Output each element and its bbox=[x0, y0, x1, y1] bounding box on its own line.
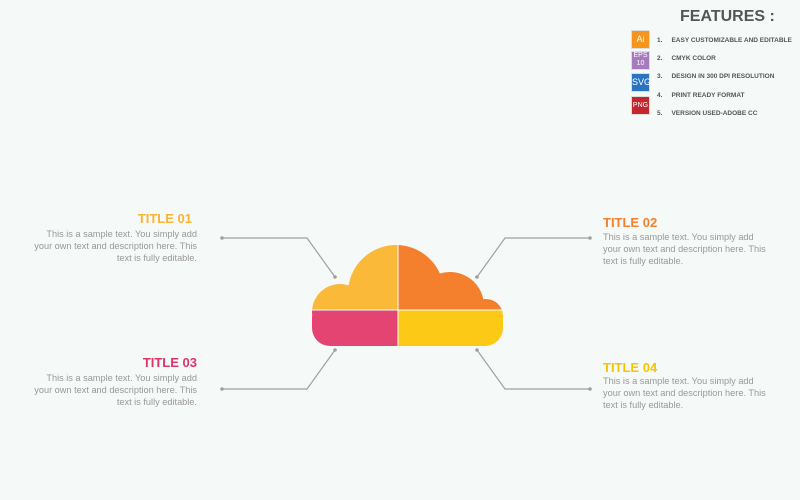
cloud diagram with connectors bbox=[220, 236, 592, 391]
text 03: text is fully editable. bbox=[117, 397, 197, 407]
title 01: TITLE 01 bbox=[138, 211, 192, 226]
icon: Ai bbox=[631, 30, 650, 49]
text 01: text is fully editable. bbox=[117, 253, 197, 263]
connector lines bbox=[222, 238, 590, 389]
features list bbox=[631, 30, 792, 117]
icon: EPS: 10 bbox=[637, 60, 644, 67]
text 01 bbox=[34, 229, 197, 263]
text 04: This is a sample text. You simply add bbox=[603, 376, 754, 386]
title 04: TITLE 04 bbox=[603, 360, 657, 375]
icon: Ai: Ai bbox=[636, 34, 644, 44]
text 01: This is a sample text. You simply add bbox=[46, 229, 197, 239]
feature 3: 3. DESIGN IN 300 DPI RESOLUTION bbox=[657, 73, 774, 80]
text 01: your own text and description here. This bbox=[34, 241, 197, 251]
text 03: your own text and description here. This bbox=[34, 385, 197, 395]
text 03: This is a sample text. You simply add bbox=[46, 373, 197, 383]
text 04 bbox=[603, 376, 766, 410]
feature 2: 2. CMYK COLOR bbox=[657, 55, 716, 62]
title 03: TITLE 03 bbox=[143, 355, 197, 370]
text 04: text is fully editable. bbox=[603, 400, 683, 410]
features heading: FEATURES : bbox=[680, 8, 775, 25]
cloud bbox=[312, 245, 503, 346]
feature 1: 1. EASY CUSTOMIZABLE AND EDITABLE bbox=[657, 37, 792, 44]
icon: PNG bbox=[631, 96, 650, 115]
icon: PNG: PNG bbox=[633, 102, 648, 109]
icon: SVG: SVG bbox=[632, 77, 651, 87]
icon: EPS: EPS bbox=[633, 52, 648, 59]
text 02: your own text and description here. This bbox=[603, 244, 766, 254]
icon: SVG bbox=[631, 73, 650, 92]
text 02 bbox=[603, 232, 766, 266]
feature 4: 4. PRINT READY FORMAT bbox=[657, 92, 745, 99]
text 04: your own text and description here. This bbox=[603, 388, 766, 398]
text 03 bbox=[34, 373, 197, 407]
text 02: text is fully editable. bbox=[603, 256, 683, 266]
icon: EPS bbox=[631, 51, 650, 70]
title 02: TITLE 02 bbox=[603, 215, 657, 230]
text 02: This is a sample text. You simply add bbox=[603, 232, 754, 242]
feature 5: 5. VERSION USED-ADOBE CC bbox=[657, 110, 757, 117]
